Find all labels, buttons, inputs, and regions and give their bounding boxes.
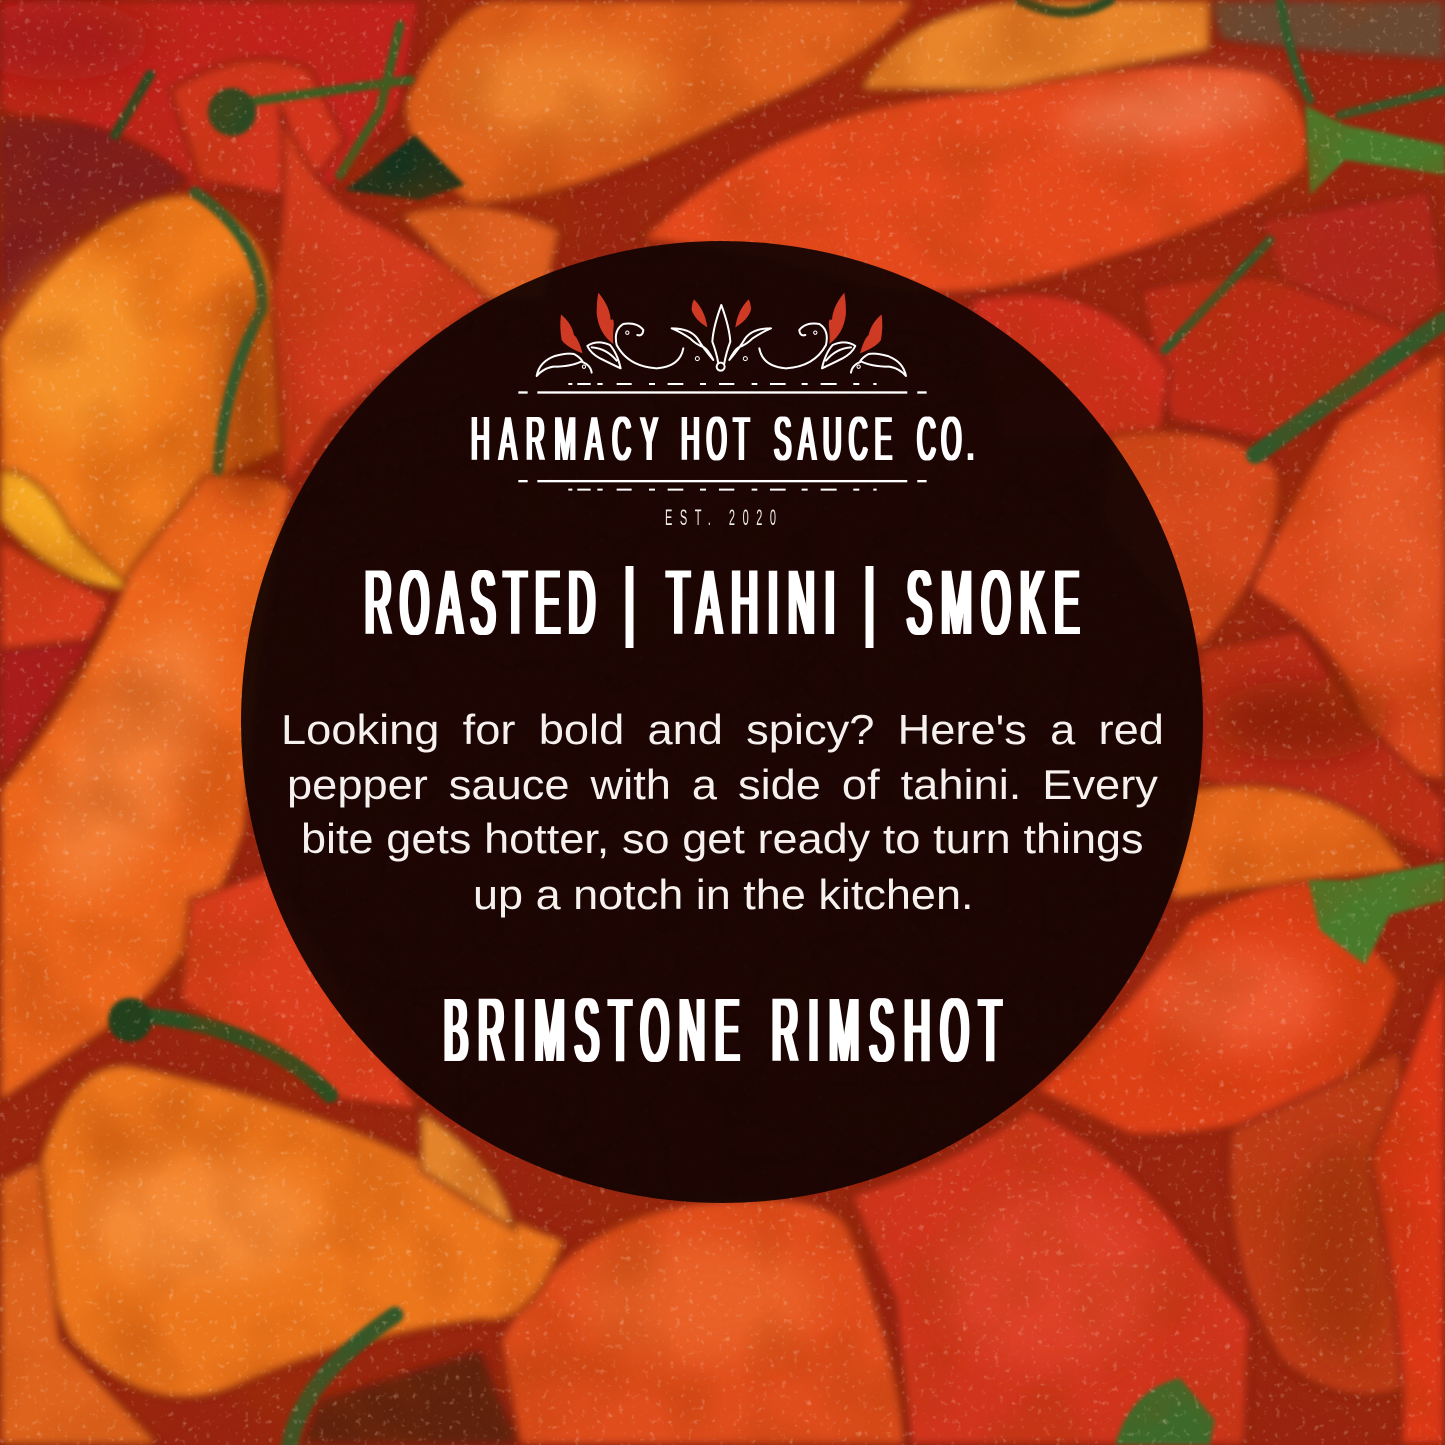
product name: RIMSHOT — [772, 980, 1001, 1081]
logo ornament — [518, 293, 927, 491]
flavor headline: SMOKE — [907, 551, 1079, 654]
flavor headline: TAHINI — [667, 551, 835, 654]
brand name: HOT — [681, 405, 749, 474]
flavor headline: ROASTED — [365, 551, 595, 654]
description text: bite gets hotter, so get ready to turn things — [301, 816, 1144, 862]
established date: EST. 2020 — [665, 505, 776, 530]
brand name: SAUCE — [774, 405, 892, 474]
description text: pepper sauce with a side of tahini. Every — [287, 761, 1158, 808]
flavor headline — [365, 551, 1079, 654]
product name: BRIMSTONE — [444, 980, 739, 1081]
brand name: CO. — [917, 405, 974, 474]
brand name: HARMACY — [471, 405, 658, 474]
brand name — [471, 405, 974, 474]
description text: up a notch in the kitchen. — [473, 872, 973, 918]
description text: Looking for bold and spicy? Here's a red — [281, 706, 1164, 753]
product name — [444, 980, 1001, 1081]
